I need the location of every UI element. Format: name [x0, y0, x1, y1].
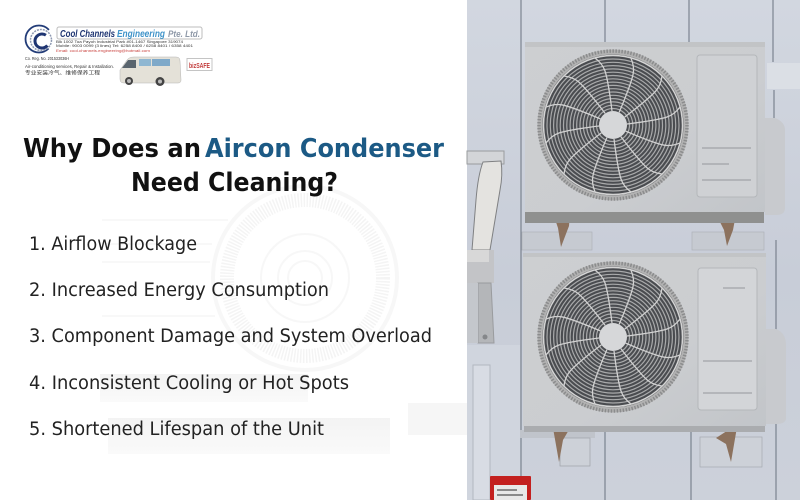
list of reasons	[29, 234, 432, 440]
title: Aircon Condenser	[205, 134, 444, 164]
condenser unit 1	[525, 42, 785, 223]
title: Why Does an	[23, 134, 201, 164]
list of reasons: 2. Increased Energy Consumption	[29, 280, 329, 301]
left background panel	[0, 0, 467, 500]
fan grille	[538, 262, 688, 412]
title: Need Cleaning?	[131, 168, 338, 198]
side panel	[697, 55, 757, 197]
list of reasons: 1. Airflow Blockage	[29, 234, 197, 255]
photo: outdoor condenser units on wall	[467, 0, 800, 500]
mounting brackets	[520, 213, 764, 467]
wall cladding	[467, 0, 800, 500]
company name plate: Cool Channels	[60, 29, 115, 40]
logo mark	[20, 20, 58, 58]
badge: bizSAFE	[187, 58, 212, 70]
company address: Email: cool.channels.engineering@hotmail.com	[56, 48, 151, 53]
company name plate: Engineering	[117, 29, 165, 40]
side panel	[698, 268, 757, 410]
list of reasons: 5. Shortened Lifespan of the Unit	[29, 419, 324, 440]
registration and services: Co. Reg. No. 201533036H	[25, 56, 69, 61]
condenser unit 2	[523, 253, 786, 432]
registration and services: 专业安装冷气、维修保养工程	[25, 70, 100, 76]
red electrical box	[490, 476, 531, 500]
registration and services: Air-conditioning services, Repair & Installation.	[25, 64, 114, 69]
badge: bizSAFE: bizSAFE	[189, 63, 210, 70]
list of reasons: 3. Component Damage and System Overload	[29, 326, 432, 347]
icon: service van	[120, 57, 181, 86]
list of reasons: 4. Inconsistent Cooling or Hot Spots	[29, 373, 349, 394]
company name plate: Pte. Ltd.	[168, 29, 200, 39]
fan grille	[538, 50, 688, 200]
company address	[56, 39, 194, 53]
company address: Mobile: 9003 0099 (3 lines) Tel: 6258 8400 / 6258 8401 / 6358 4401	[56, 43, 194, 48]
wall bracket and strap	[467, 151, 504, 343]
logo: Cool Channels Engineering	[20, 20, 212, 86]
title	[23, 134, 444, 198]
watermark: faded condenser	[100, 186, 467, 454]
registration and services	[25, 56, 114, 76]
company name plate	[57, 27, 202, 40]
company address: Blk 1002 Toa Payoh Industrial Park #01-1467 Singapore 319074	[56, 39, 184, 44]
